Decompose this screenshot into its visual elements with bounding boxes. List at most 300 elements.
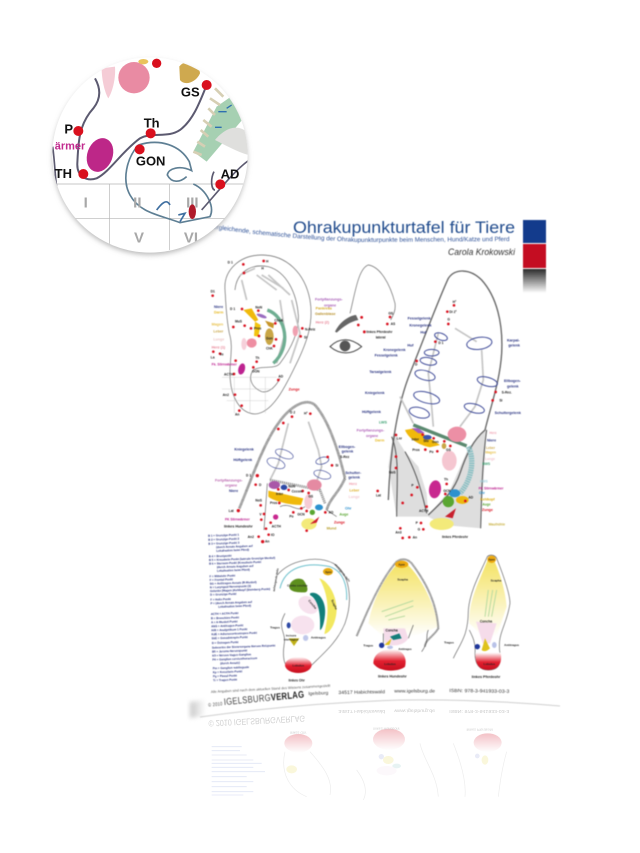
labels: Lunge — [213, 338, 224, 342]
legend of acupuncture points: B 2 = Grunzige-Punkt 2 — [208, 537, 240, 542]
horse labels: Apex — [488, 558, 495, 562]
lateral labels: linkes Pferdeohr — [366, 330, 393, 334]
zone: darm — [243, 308, 258, 322]
zone: kehlkopf — [456, 496, 469, 504]
dog labels: ACTH — [272, 524, 281, 528]
labels: La — [211, 355, 215, 359]
reflected chart titles: linkes Pferdeohr — [467, 727, 494, 731]
zone: darm — [405, 428, 440, 447]
colour square: red — [523, 244, 546, 268]
dog labels: GS — [308, 494, 314, 498]
dog labels: Zunge — [334, 520, 345, 524]
ear zone labels: Tragus — [270, 625, 280, 629]
labels: H — [266, 260, 269, 264]
horse labels: Lunge — [485, 457, 495, 461]
horse labels: P — [411, 484, 414, 488]
horse labels: S-Rez. — [502, 391, 512, 395]
dog labels: linkes Hundeohr — [378, 674, 407, 678]
ear zone labels: Scapha — [330, 599, 338, 611]
horse tragus — [475, 644, 480, 649]
publisher logo: © 2010 IGELSBURGVERLAG — [208, 689, 305, 710]
intertragic loop — [126, 142, 211, 223]
dog labels: Po — [289, 514, 294, 518]
horse labels: G — [447, 318, 450, 322]
zone: niere — [281, 485, 287, 490]
foreleg bones — [277, 300, 300, 363]
zone: gallenblase — [265, 321, 274, 328]
point labels: AD — [221, 167, 239, 182]
horse labels: Zunge — [482, 508, 493, 512]
horse labels: An3 — [395, 530, 402, 534]
dog labels: Scapha — [397, 578, 408, 582]
dog labels: Kniegelenk — [234, 447, 255, 451]
dog labels: organe — [225, 484, 237, 488]
gold tip — [138, 59, 148, 64]
zone: maul — [301, 518, 317, 530]
horse labels: LWS — [379, 421, 387, 425]
intertragic olive — [289, 638, 299, 646]
legend of acupuncture points: Subcortex der Sinnesorgane-Nerven Reizpunkt — [212, 643, 275, 650]
dog labels: Antitragus — [398, 647, 412, 651]
zone: stirnwärmer — [428, 480, 442, 499]
horse labels: FK Stirnwärmer — [479, 487, 504, 491]
legend footnote: Alle Angaben sind nach dem aktuellen Stand des Wissens zusammengestellt — [211, 684, 330, 694]
zone: lunge — [247, 338, 257, 348]
legend of acupuncture points: D = Grunzige-Punkt — [210, 592, 237, 597]
horse labels: linkes Pferdeohr — [472, 675, 501, 679]
dog antitragus — [387, 646, 393, 649]
legend of acupuncture points: Gelenke (Magen-)Kehlkopf (Steinberg-Punkt) — [210, 587, 270, 593]
lower left line — [53, 147, 57, 187]
ear outline — [388, 271, 502, 515]
dog labels: Cccom — [292, 490, 303, 494]
point labels: GS — [181, 84, 200, 99]
zone: lunge — [442, 451, 457, 471]
labels: Fk. Stirnwärmer — [212, 363, 238, 367]
acupuncture points — [211, 260, 366, 412]
horse labels: Kronegelenk — [383, 348, 406, 352]
dog labels: Ellbogen- — [339, 445, 356, 449]
blue squiggles — [157, 202, 185, 222]
zone: fortpflanzung — [412, 428, 425, 433]
dog labels — [363, 563, 412, 678]
lateral labels: lateral — [376, 335, 386, 339]
dog labels: Mund — [327, 526, 336, 530]
scapha yellow — [319, 578, 337, 634]
horse labels: gelenk — [507, 384, 520, 388]
eyelashes — [335, 315, 358, 333]
labels: Gon — [266, 336, 273, 340]
zone: maul — [430, 518, 454, 530]
magenta label: ärmer — [55, 140, 86, 152]
reflected chart titles: linkes Hundeohr — [373, 726, 401, 730]
grey inner ear — [388, 428, 487, 528]
horse labels: Maulhöhle — [489, 522, 505, 526]
ear zone labels: Lobulus — [293, 664, 304, 668]
horse concha — [476, 622, 497, 643]
legend of acupuncture points: B 5 = Kreuzbein-Punkt (laterale Grunzige-Muskel) — [209, 556, 275, 562]
zone: ohr — [449, 489, 460, 497]
legend of acupuncture points: Pg = Pineal-Punkt — [213, 673, 237, 678]
horse labels: GCN — [443, 489, 451, 493]
labels: Si — [304, 335, 307, 339]
legend of acupuncture points: Lokalisation beim Pferd) — [217, 568, 250, 573]
horse labels: Kehlkopf — [480, 498, 495, 502]
ear zone labels: linkes Ohr — [289, 678, 305, 682]
lateral labels: AS — [391, 322, 396, 326]
labels: D 1 — [228, 260, 233, 264]
horse lobe — [475, 653, 501, 670]
legend of acupuncture points: (durch Ansatz Angaben auf — [217, 564, 253, 569]
ear zone labels: Cymba conchae — [287, 584, 308, 588]
reflected footer: © 2010 IGELSBURGVERLAG — [208, 714, 305, 729]
colour zones — [268, 479, 323, 530]
dog green bands — [382, 601, 413, 620]
horse labels: Darm — [375, 439, 385, 443]
horse labels: BWS — [482, 462, 491, 466]
horse points — [376, 304, 497, 539]
dog labels: Leber — [349, 488, 360, 492]
inner lines — [264, 483, 337, 530]
grey bone — [215, 128, 248, 155]
labels: Niere — [214, 305, 223, 309]
horse labels: linkes Pferdeohr — [442, 535, 469, 539]
labels: organe — [324, 303, 336, 307]
horse labels: HWS — [480, 479, 489, 483]
zone: lunge — [304, 494, 312, 509]
dog and horse outer ear charts — [357, 555, 519, 679]
horse labels: Tragus — [444, 640, 454, 644]
zone: ohr — [315, 504, 323, 510]
reflected legend lines — [212, 747, 265, 795]
horse labels — [444, 558, 519, 679]
dog labels: Concha — [386, 629, 398, 633]
point labels — [55, 84, 239, 182]
postal code: 34517 Habichtswald — [338, 689, 385, 695]
horse green bands — [485, 590, 497, 617]
spine bones — [193, 88, 223, 155]
reflected chart titles — [290, 726, 494, 735]
concha pink — [295, 592, 322, 618]
grid — [56, 184, 248, 250]
tragus blue dot — [287, 622, 291, 628]
horse labels: Ellbogen- — [504, 379, 521, 383]
horse ear chart — [357, 271, 522, 540]
pupil — [340, 341, 350, 351]
horse labels: Lat — [376, 493, 382, 497]
horse labels: Schultergelenk — [495, 411, 522, 415]
pink lung — [118, 62, 150, 93]
legend of acupuncture points: A = A-Muskel-Punkt — [211, 619, 238, 624]
dog labels: Si — [335, 464, 339, 468]
reflected zones — [286, 754, 488, 775]
cymba green — [289, 579, 307, 592]
legend of acupuncture points: B = Bronchien-Punkt — [211, 615, 239, 620]
lateral points — [360, 316, 391, 333]
horse labels: Leber — [486, 446, 496, 450]
zone: magen — [265, 328, 274, 345]
legend of acupuncture points: (durch Ansatz Angaben auf — [216, 544, 253, 549]
concha lower — [291, 616, 314, 634]
roman numerals: II — [133, 194, 141, 211]
legend of acupuncture points: F = Helix-Punkt — [210, 597, 231, 602]
horse labels: Sto — [423, 439, 429, 443]
reflected horse lobe — [474, 733, 502, 752]
horse labels: Po — [429, 450, 434, 454]
labels: Th — [255, 356, 259, 360]
grid — [222, 377, 277, 413]
legend of acupuncture points: K5 = Nervus-Vagus-Ganglion — [212, 652, 251, 658]
horse intertragic — [482, 638, 490, 651]
lateral ear outline — [350, 265, 395, 320]
human ear chart — [211, 255, 366, 416]
dog tragus — [379, 643, 384, 648]
legend of acupuncture points: Tr = Tragus-Punkt — [213, 677, 237, 682]
dog labels: Pros — [270, 501, 278, 505]
horse labels: Scapha — [491, 579, 502, 583]
dog labels: Herz — [349, 482, 357, 486]
horse labels: Si — [499, 399, 503, 403]
teal anthelix — [310, 593, 325, 630]
zone: auge — [443, 496, 454, 507]
legend of acupuncture points: B 4 = Brustpunkt — [209, 554, 232, 558]
dog labels: Lunge — [349, 495, 360, 499]
spine band — [270, 480, 325, 503]
horse labels: GS — [446, 448, 452, 452]
dog labels: Schulter- — [345, 471, 362, 475]
publisher address: Igelsburg — [308, 690, 329, 696]
roman numerals: VI — [184, 229, 198, 246]
apex orange — [323, 568, 333, 575]
reflected footer: 34517 Habichtswald — [338, 709, 386, 714]
ear zone labels: Incisura — [286, 634, 297, 638]
zone: fortpflanzung — [256, 313, 267, 319]
labels: Fortpflanzungs- — [315, 298, 343, 302]
reflected dog lobe — [373, 729, 405, 750]
spine green — [194, 98, 242, 162]
dog labels — [215, 410, 362, 544]
legend of acupuncture points: F = Frontal-Punkt — [210, 577, 233, 582]
zone: stirnwärmer — [237, 363, 246, 375]
horse scapha gradient — [469, 558, 507, 637]
zone: auge — [310, 510, 315, 515]
dog ear outline — [239, 402, 345, 510]
red lobe — [285, 657, 312, 673]
horse labels: Kniegelenk — [365, 391, 385, 395]
ear outline — [225, 255, 311, 414]
labels: GON — [252, 370, 260, 374]
eye outline — [330, 340, 362, 353]
labels: Ve — [220, 352, 224, 356]
horse apex — [487, 556, 496, 563]
dog ear outline — [357, 559, 438, 647]
legend of acupuncture points: P4 = Ganglion cervicothoracicum — [212, 656, 258, 662]
legend of acupuncture points: D = Östrogen-Punkt — [212, 639, 239, 645]
spine band — [413, 425, 467, 446]
reflected chart titles: linkes Ohr — [290, 731, 307, 735]
colour square: black fade — [523, 269, 546, 293]
ear zone labels: aufsteigende Helix — [272, 567, 280, 592]
colour zones — [405, 427, 469, 530]
legend of acupuncture points: F = Mittelohr-Punkt — [209, 573, 235, 578]
dog labels: NoS — [255, 498, 263, 502]
labels: Pros — [254, 327, 262, 331]
zone: leber — [254, 322, 261, 337]
horse labels: Lobulus — [484, 662, 495, 666]
publisher footer — [208, 688, 510, 710]
legend of acupuncture points: B 3 = Grunzige-Punkt 3 — [208, 541, 240, 546]
zone: fortpflanzung — [269, 481, 280, 489]
spine bands — [267, 310, 285, 363]
horse labels: Lnr — [397, 437, 403, 441]
horse labels: Huf — [407, 344, 414, 348]
legend of acupuncture points: SG = Antitragus-Ansatz (R-Muskel) — [210, 580, 257, 586]
horse labels: Concha — [480, 619, 492, 623]
legend of acupuncture points: Lokalisation beim Pferd) — [216, 548, 249, 553]
reflected human lobe — [284, 734, 312, 753]
point labels: Th — [144, 115, 160, 130]
ear zone labels: Concha — [307, 599, 318, 610]
legend of acupuncture points: ACTH = ACTH-Punkt — [211, 611, 239, 616]
dog labels: Niere — [229, 489, 238, 493]
dog labels: gelenk — [348, 475, 361, 479]
horse labels: An — [413, 536, 417, 540]
neck vertebrae — [460, 447, 472, 493]
legend of acupuncture points: KdE = Adrenocorticotropes-Punkt — [211, 631, 257, 636]
horse labels: Herz — [489, 431, 497, 435]
horse labels: D — [415, 363, 418, 367]
dog labels: FK Stirnwärmer — [225, 518, 250, 522]
roman numerals: V — [134, 229, 144, 246]
teal helix — [280, 565, 347, 600]
dog labels: Ohr — [345, 507, 352, 511]
horse labels: Antitragus — [504, 643, 519, 647]
dog labels: Tragus — [363, 644, 374, 648]
horse labels: Fesselgelenk — [408, 317, 432, 321]
skeleton hind limb — [240, 268, 290, 300]
legend of acupuncture points: Kp = Kreuzbein-Punkt — [213, 669, 242, 674]
horse labels: Huf — [420, 330, 427, 334]
ear zone labels: absteigende Helix — [334, 563, 352, 583]
poster — [188, 218, 560, 720]
labels: H — [261, 266, 264, 270]
legend of acupuncture points: P = (durch Ansatz Angaben auf — [210, 600, 252, 605]
horse labels: NoS — [389, 470, 396, 474]
ear zone labels: Antitragus — [311, 635, 326, 639]
point labels: GON — [136, 153, 165, 168]
subtitle: Vergleichende, schematische Darstellung der Ohrakupunkturpunkte beim Menschen, Hund/Katze und Pferd — [214, 224, 510, 244]
dog labels: Hüftgelenk — [233, 458, 253, 462]
labels: Zunge — [289, 387, 300, 391]
point labels: P — [64, 122, 73, 137]
legend of acupuncture points: B5 = Jerome-Nervenpunkt — [212, 648, 247, 654]
magnified content — [53, 59, 248, 250]
antihelix line — [202, 161, 248, 210]
legend of acupuncture points: H/R = Analgetikum 1 Punkt — [211, 627, 247, 632]
poster reflection — [208, 708, 510, 800]
joint ovals — [266, 447, 332, 481]
dog scapha gradient — [368, 562, 438, 637]
labels: Gallenblase — [315, 312, 336, 316]
spine blue dashes — [215, 105, 232, 127]
labels: Herz (1) — [212, 345, 226, 349]
reflected outlines — [284, 743, 507, 800]
dog labels: AD — [329, 510, 334, 514]
inner helix — [235, 266, 298, 392]
dog labels: linkes Hundeohr — [224, 525, 253, 529]
dog labels: IO — [271, 533, 275, 537]
dog labels: Apex — [398, 563, 405, 567]
labels: AD — [278, 375, 284, 379]
dog labels: Fortpflanzungs- — [215, 478, 243, 482]
horse labels: Kronegelenk — [409, 324, 432, 328]
horse labels: Di 2° — [449, 310, 457, 314]
horse ear outline — [453, 555, 510, 670]
ear zone labels: intertragica — [284, 637, 299, 641]
legend of acupuncture points — [208, 531, 279, 682]
isbn: ISBN: 978-3-941933-03-3 — [449, 688, 510, 694]
labels: Darm — [214, 311, 224, 315]
horse labels: AD — [468, 496, 474, 500]
dog points — [237, 412, 333, 543]
dog concha teal — [390, 633, 402, 640]
labels: MuS — [235, 320, 243, 324]
dog labels: Lat — [229, 509, 235, 513]
poster shadow — [190, 700, 206, 718]
dog labels: D 2 — [290, 410, 295, 414]
dog labels: H° — [304, 412, 308, 416]
ear zone labels — [270, 563, 352, 682]
dog labels: V — [259, 512, 262, 516]
horse labels: P — [416, 521, 419, 525]
labels — [211, 260, 343, 416]
horse labels: gelenk — [508, 344, 521, 348]
labels: N-Reiz — [305, 327, 316, 331]
horse labels: Niere — [487, 438, 496, 442]
dog labels: NoN — [288, 484, 296, 488]
labels: Magen — [212, 322, 223, 326]
dog labels: Lobulus — [384, 662, 396, 666]
points — [73, 59, 225, 189]
horse labels: Gon — [432, 440, 439, 444]
labels: ChoA — [274, 318, 284, 322]
small lateral horse ear and eye — [330, 265, 522, 540]
antitragus oval — [303, 635, 308, 641]
legend of acupuncture points: ANS = Antitragus-Punkt — [211, 623, 243, 628]
lateral labels: GS — [388, 311, 394, 315]
dog labels: GCN — [297, 512, 305, 516]
roman numerals: I — [84, 194, 88, 211]
reflected footer — [208, 708, 510, 729]
magenta zone — [86, 138, 114, 172]
colour zones — [237, 308, 298, 375]
zone: zunge — [445, 508, 456, 518]
legend of acupuncture points: N = Laryngeal-Nervenpunkt (3) — [210, 584, 251, 589]
zone: herz — [448, 427, 466, 442]
zone: zunge — [310, 517, 319, 524]
dog limb bones — [270, 422, 322, 487]
horse labels: organe — [366, 434, 378, 438]
legend of acupuncture points: B 1 = Grunzige-Punkt 1 — [208, 533, 240, 538]
zone: herz — [307, 479, 322, 491]
ear zone labels: Apex — [325, 570, 332, 574]
labels: Leber — [213, 329, 224, 333]
horse labels: Hüftgelenk — [362, 410, 382, 414]
dog intertragic — [384, 638, 392, 645]
poster bottom edge — [200, 700, 560, 717]
eye — [330, 315, 362, 353]
title: Ohrakupunkturtafel für Tiere — [293, 218, 515, 237]
